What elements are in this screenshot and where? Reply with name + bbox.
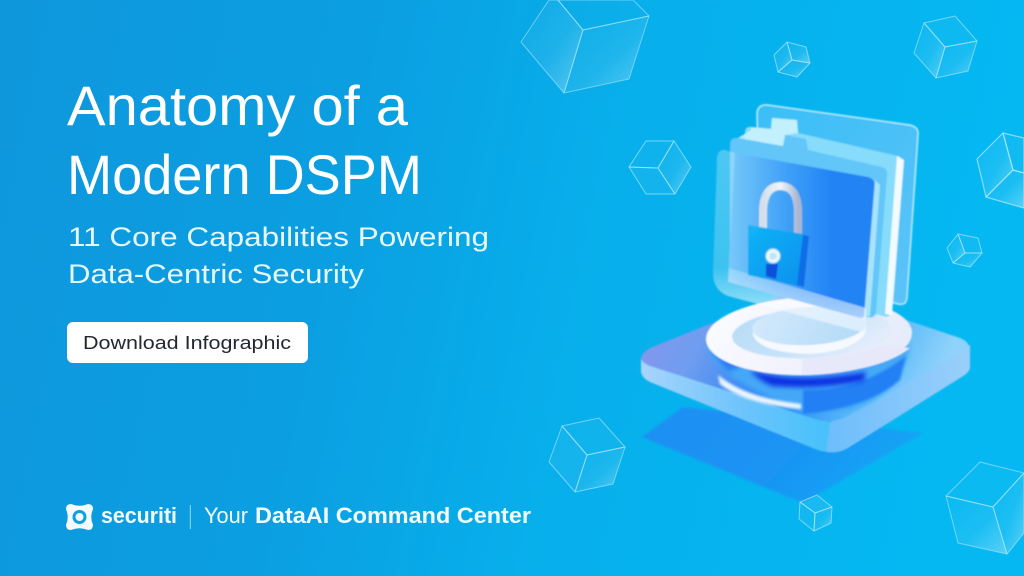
platform base [641,289,970,452]
subtitle [68,222,489,289]
back folder sheet [757,105,918,304]
title [67,74,422,206]
title: Modern DSPM [67,143,422,206]
subtitle: Data-Centric Security [68,259,365,289]
footer brand text: DataAI Command Center [255,503,531,528]
footer brand text: Your [204,503,248,528]
padlock [748,186,809,287]
cube: bottom small [799,495,832,531]
deep blue front sheet [728,153,875,318]
keyhole [766,264,778,279]
cube: top right [914,16,977,78]
cube: small right [947,234,982,267]
third folder [730,135,887,317]
footer brand text: securiti [101,503,177,528]
second folder with white tab [745,118,903,317]
icon: securiti logo [66,504,93,530]
refraction under ring [707,345,910,414]
illustration: folder and padlock on glass base [641,105,970,453]
floor shadow [642,407,923,503]
cube: large top [521,0,649,93]
shackle [763,186,798,236]
cube: left of folder [629,141,691,194]
download button: Download Infographic [83,332,291,353]
subtitle: 11 Core Capabilities Powering [68,222,489,252]
cube: bottom right [946,462,1024,554]
download button [67,322,308,363]
title: Anatomy of a [67,74,409,137]
white ring [705,293,913,379]
cube: bottom left [549,418,625,492]
frosted glass front [713,150,866,332]
cube: small top [774,42,810,77]
inner disc [751,304,867,354]
lock body [748,225,809,287]
footer brand text [101,503,531,529]
cube: right edge [977,133,1024,208]
